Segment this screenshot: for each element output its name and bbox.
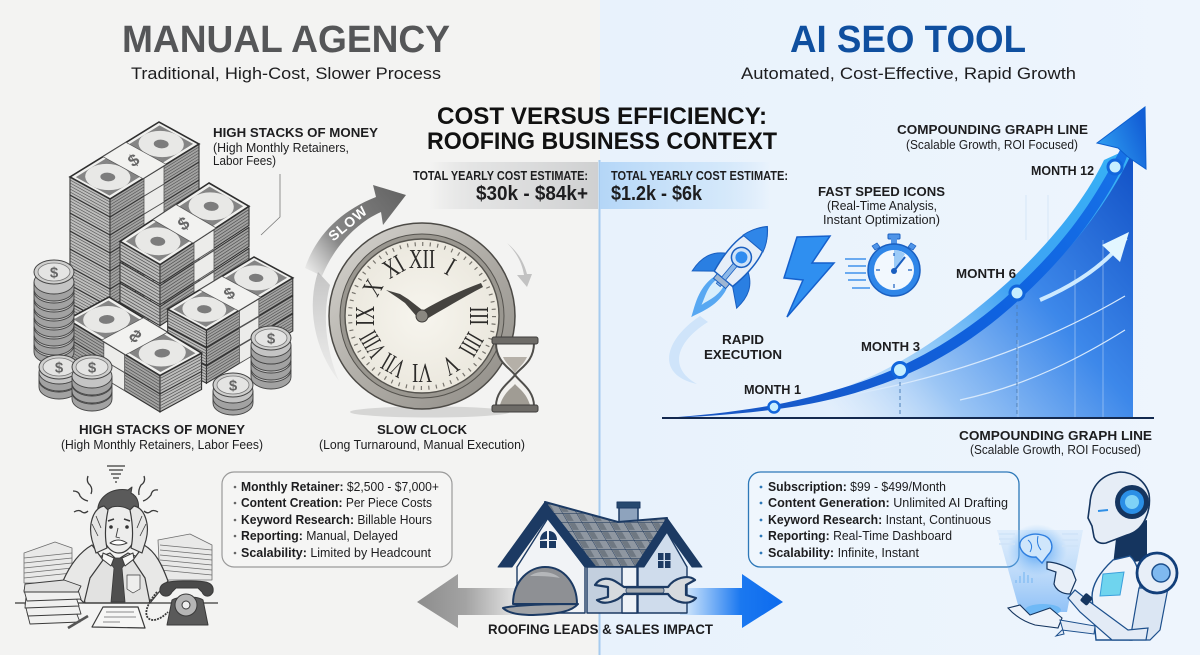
illustration: coin stacks — [34, 260, 291, 415]
curve highlight band — [850, 150, 1133, 385]
area under curve — [662, 135, 1133, 418]
illustration: robot with hologram — [997, 472, 1177, 640]
month labels — [744, 163, 1094, 397]
label: compounding graph line top: COMPOUNDING GRAPH LINE — [897, 122, 1088, 137]
month labels: MONTH 3 — [861, 339, 920, 354]
heading: AI SEO tool: Automated, Cost-Effective, Rapid Growth — [741, 64, 1076, 83]
label: high stacks of money top — [213, 125, 378, 235]
panel: AI SEO tool background — [600, 0, 1200, 655]
title: ROOFING BUSINESS CONTEXT — [427, 128, 777, 155]
ear disc — [1115, 485, 1149, 519]
illustration: slow clock: XI — [378, 249, 410, 285]
illustration: slow clock: III — [463, 307, 493, 325]
list: AI SEO tool: Keyword Research: Instant, Continuous — [768, 512, 991, 527]
head — [102, 503, 136, 553]
list: AI SEO tool — [748, 472, 1019, 567]
panel: manual agency background — [0, 0, 600, 655]
rear arm — [1130, 588, 1168, 640]
telephone — [167, 597, 208, 625]
curve line — [662, 150, 1128, 418]
label: slow clock: SLOW CLOCK — [377, 422, 468, 437]
illustration: slow clock: XII — [409, 245, 435, 275]
hands — [91, 506, 108, 553]
front arm and hand — [1068, 590, 1148, 640]
month labels: MONTH 6 — [956, 266, 1016, 281]
arrow head — [1097, 107, 1146, 169]
label: rapid execution: EXECUTION — [704, 347, 782, 362]
paper stacks back — [24, 534, 212, 583]
main roof — [545, 502, 667, 567]
faint secondary arrows — [820, 232, 1129, 400]
illustration: slow clock — [329, 223, 515, 418]
front paper stack — [24, 580, 81, 624]
panel divider — [598, 160, 600, 655]
tie and pocket — [111, 558, 125, 602]
left gable — [517, 518, 585, 613]
label: compounding graph line bottom: COMPOUNDING GRAPH LINE — [959, 428, 1152, 443]
label: high stacks of money top: (High Monthly Retainers, — [213, 141, 349, 155]
stress marks — [73, 466, 158, 513]
title — [427, 103, 777, 155]
heading: manual agency: Traditional, High-Cost, Slower Process — [131, 64, 441, 83]
list: AI SEO tool: Subscription: $99 - $499/Month — [768, 479, 946, 494]
hologram — [997, 524, 1083, 616]
right gable — [638, 532, 687, 613]
label: fast speed icons: (Real-Time Analysis, — [827, 199, 937, 213]
heading: manual agency — [122, 19, 450, 83]
illustration: slow clock: VII — [376, 347, 411, 384]
arrow: slow: SLOW — [325, 202, 371, 244]
arms — [63, 545, 103, 603]
label: high stacks of money bottom — [61, 422, 263, 452]
illustration: slow clock: VI — [412, 357, 432, 387]
neck — [1113, 520, 1147, 565]
title: COST VERSUS EFFICIENCY: — [437, 103, 767, 130]
list: manual agency: Monthly Retainer: $2,500 - $7,000+ — [241, 479, 439, 494]
icon: hourglass — [492, 337, 538, 412]
heading: AI SEO tool — [741, 19, 1076, 83]
torso — [78, 553, 157, 603]
heading: AI SEO tool: AI SEO TOOL — [790, 19, 1026, 61]
cost estimate: AI SEO tool: TOTAL YEARLY COST ESTIMATE: — [611, 169, 788, 183]
label: rapid execution — [704, 332, 782, 362]
cost estimate: manual agency: $30k - $84k+ — [476, 183, 588, 205]
axis — [662, 417, 1154, 419]
label: compounding graph line bottom: (Scalable Growth, ROI Focused) — [970, 443, 1141, 457]
list: manual agency: Reporting: Manual, Delayed — [241, 528, 398, 543]
chart: compounding graph — [662, 107, 1154, 418]
month labels: MONTH 12 — [1031, 163, 1094, 178]
illustration: house with helmet and wrench — [498, 502, 702, 615]
illustration: slow clock: X — [357, 274, 390, 301]
arrow: right blue — [680, 574, 783, 628]
label: compounding graph line bottom — [959, 428, 1152, 457]
list: manual agency: Scalability: Limited by Headcount — [241, 545, 431, 560]
list: AI SEO tool: Content Generation: Unlimited AI Drafting — [768, 495, 1008, 510]
label: rapid execution: RAPID — [722, 332, 764, 347]
label: fast speed icons — [818, 184, 945, 227]
chimney — [619, 506, 638, 532]
illustration: slow clock: V — [436, 348, 463, 381]
list: manual agency — [222, 472, 452, 567]
torso — [1092, 556, 1140, 640]
label: compounding graph line top — [897, 122, 1088, 152]
illustration: slow clock: I — [440, 253, 460, 282]
label: compounding graph line top: (Scalable Growth, ROI Focused) — [906, 138, 1078, 152]
arrow: left grey — [417, 574, 520, 628]
label: slow clock — [319, 422, 525, 452]
cost estimate: manual agency — [413, 162, 598, 209]
cost estimate: AI SEO tool — [600, 162, 788, 209]
month labels: MONTH 1 — [744, 382, 801, 397]
wrench — [595, 577, 696, 603]
label: slow clock: (Long Turnaround, Manual Execution) — [319, 438, 525, 452]
cost estimate: AI SEO tool: $1.2k - $6k — [611, 183, 703, 205]
illustration: stressed man — [15, 466, 218, 628]
label: roofing leads and sales impact: ROOFING LEADS & SALES IMPACT — [488, 621, 713, 637]
heading: manual agency: MANUAL AGENCY — [122, 19, 450, 61]
helmet — [513, 567, 577, 604]
list: manual agency: Keyword Research: Billable Hours — [241, 512, 432, 527]
label: high stacks of money top: HIGH STACKS OF MONEY — [213, 125, 378, 140]
arrow: small clockwise — [507, 243, 532, 287]
icon: rocket — [669, 208, 790, 384]
label: high stacks of money top: Labor Fees) — [213, 154, 276, 168]
label: high stacks of money bottom: (High Monthly Retainers, Labor Fees) — [61, 438, 263, 452]
list: AI SEO tool: Reporting: Real-Time Dashboard — [768, 528, 952, 543]
icon: lightning bolt — [784, 236, 834, 317]
list: manual agency: Content Creation: Per Piece Costs — [241, 495, 432, 510]
illustration: slow clock: IIII — [453, 328, 490, 361]
shoulder — [1137, 553, 1177, 593]
illustration: money stacks — [67, 122, 293, 412]
label: fast speed icons: FAST SPEED ICONS — [818, 184, 945, 199]
label: high stacks of money bottom: HIGH STACKS OF MONEY — [79, 422, 245, 437]
data points — [768, 160, 1122, 412]
side wall — [587, 567, 638, 613]
windows — [540, 531, 670, 568]
list: AI SEO tool: Scalability: Infinite, Instant — [768, 545, 919, 560]
label: fast speed icons: Instant Optimization) — [823, 213, 940, 227]
illustration: slow clock: IX — [351, 306, 381, 326]
icon: stopwatch — [845, 234, 920, 296]
desk — [15, 602, 218, 604]
head — [1088, 472, 1149, 543]
cost estimate: manual agency: TOTAL YEARLY COST ESTIMATE: — [413, 169, 588, 183]
illustration: slow clock: VIII — [354, 326, 392, 363]
arrow: slow — [305, 185, 406, 381]
